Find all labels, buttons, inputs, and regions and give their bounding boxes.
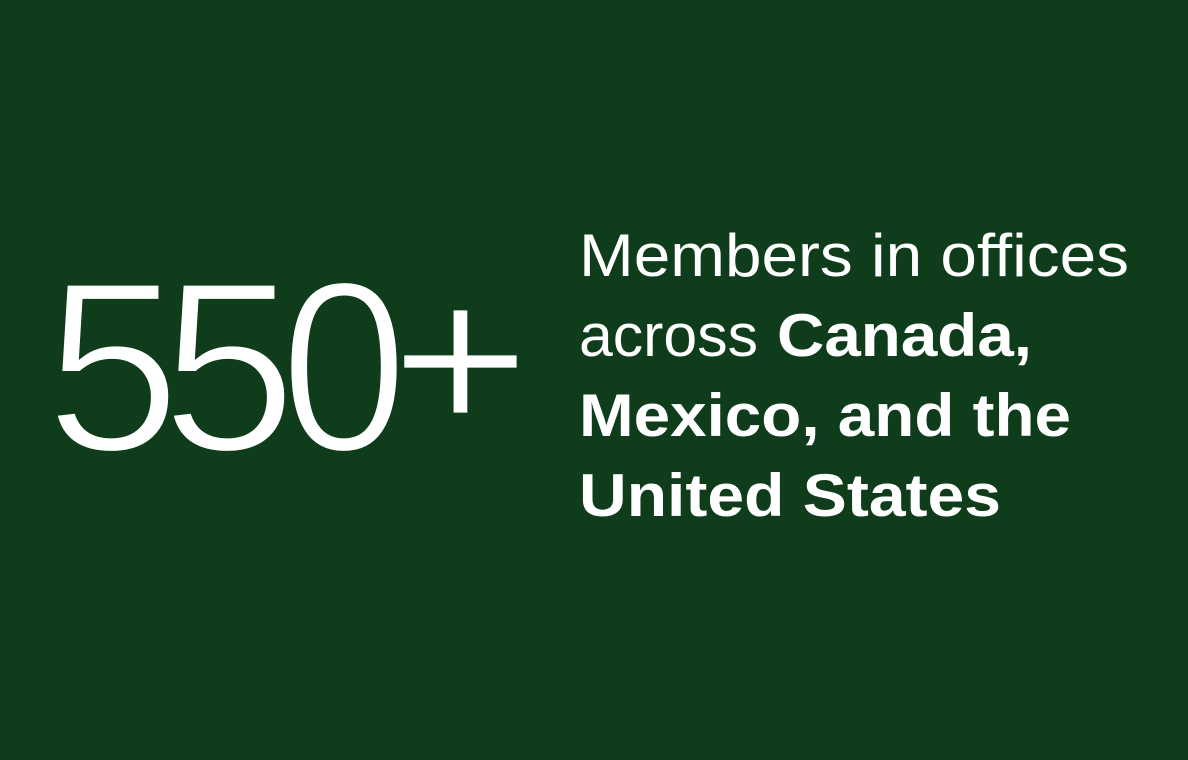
big number: 550+ — [45, 230, 530, 503]
description text: Members in offices — [579, 222, 1129, 289]
description text: Mexico, and the — [579, 382, 1071, 449]
big number: 550+: 5 — [45, 230, 181, 503]
description text — [579, 222, 1129, 529]
big number: 550+: 0 — [280, 230, 408, 503]
description text: across — [579, 302, 758, 369]
description text: Canada, — [777, 302, 1032, 369]
big number: 550+: + — [391, 238, 530, 479]
big number: 550+: 5 — [161, 230, 297, 503]
description text: United States — [579, 462, 1001, 529]
